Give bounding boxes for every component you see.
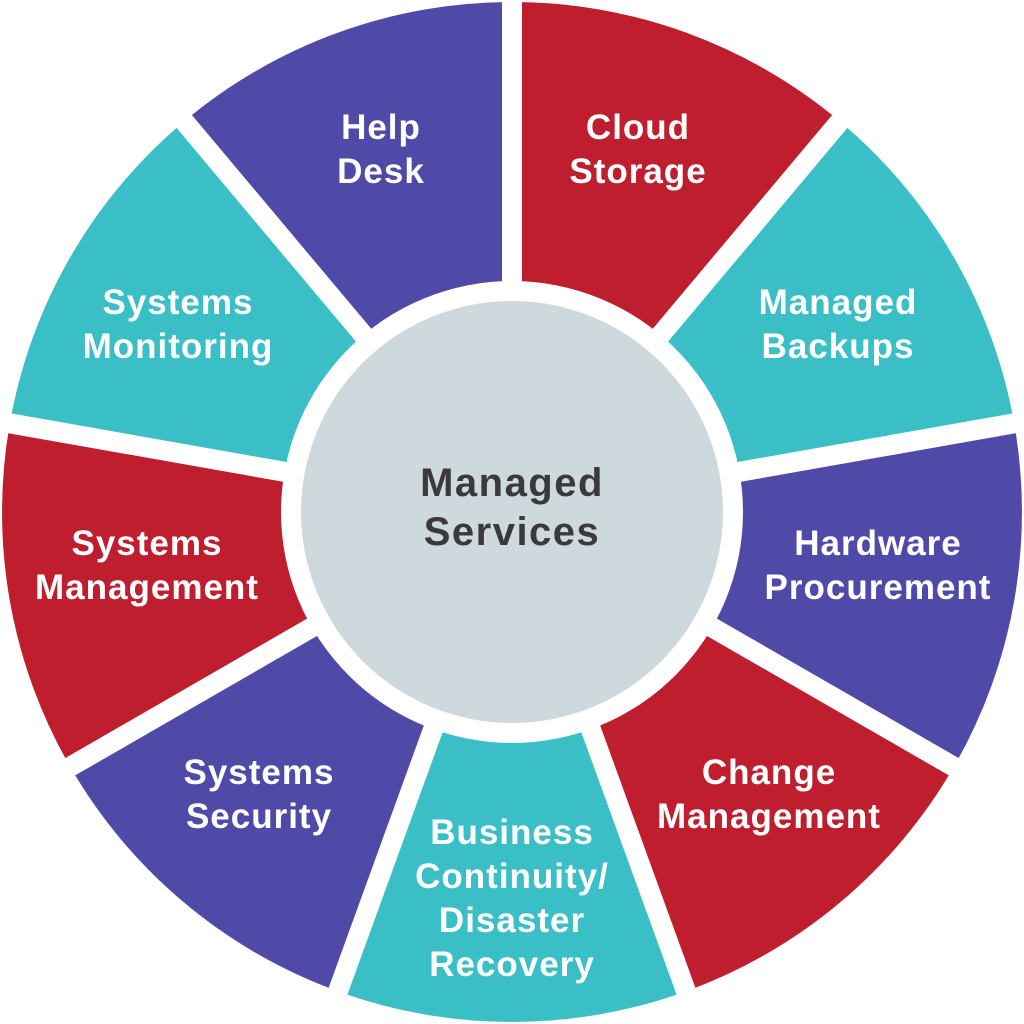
panel: managed backups (512, 121, 1014, 512)
panel: business continuity: Recovery (429, 945, 595, 984)
panel: change management (512, 512, 954, 991)
panel: systems management: Systems (72, 524, 222, 563)
panel: managed backups: Backups (762, 327, 914, 366)
panel: hardware procurement: Hardware (794, 524, 962, 563)
panel: help desk (184, 2, 512, 512)
center circle: Services (424, 510, 600, 554)
panel: systems security: Systems (184, 753, 334, 792)
panel: systems security (70, 512, 512, 991)
panel: systems management: Management (35, 568, 259, 607)
panel: change management: Change (702, 753, 836, 792)
panel: systems monitoring (10, 121, 512, 512)
panel: business continuity: Continuity/ (415, 857, 609, 896)
panel: systems security: Security (186, 797, 332, 836)
center circle: Managed (420, 461, 604, 505)
panel: systems management (2, 424, 512, 767)
panel: cloud storage: Cloud (586, 108, 690, 147)
panel: business continuity: Disaster (439, 901, 585, 940)
center circle (301, 301, 723, 723)
panel: managed backups: Managed (759, 283, 917, 322)
panel: business continuity: Business (430, 813, 594, 852)
panel: hardware procurement (512, 424, 1022, 767)
panel: cloud storage: Storage (569, 152, 707, 191)
panel: help desk: Desk (337, 152, 425, 191)
panel: systems monitoring: Monitoring (83, 327, 273, 366)
panel: help desk: Help (341, 108, 421, 147)
panel: change management: Management (657, 797, 881, 836)
panel: hardware procurement: Procurement (765, 568, 991, 607)
panel: systems monitoring: Systems (103, 283, 253, 322)
panel: business continuity (338, 512, 686, 1022)
panel: cloud storage (512, 2, 840, 512)
